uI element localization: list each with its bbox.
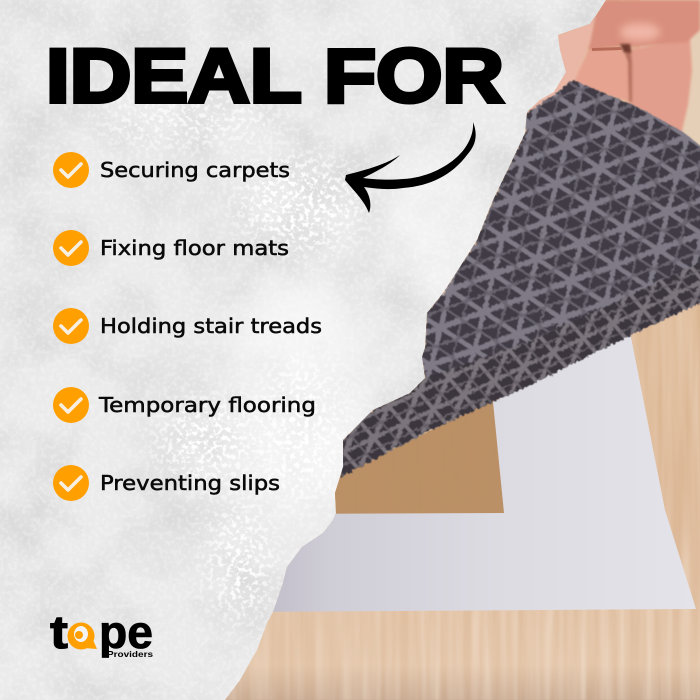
finger divider [622,46,632,102]
left knuckle line [592,47,622,51]
knuckle highlight [620,23,660,41]
item: securing carpets: Securing carpets [100,158,290,182]
item: holding stair treads [53,308,322,344]
item: preventing slips [53,465,280,501]
anti-slip mat: upper netting [340,80,700,477]
item: fixing floor mats: Fixing floor mats [100,236,289,260]
wood visible through tape window [330,400,505,514]
logo: tape providers: pe [99,606,153,658]
item: fixing floor mats [53,230,289,266]
logo: tape providers [50,606,153,659]
logo: tape providers: t [50,606,68,658]
title: IDEAL FOR [46,34,504,119]
white double-sided tape [250,332,696,612]
logo: tape providers: Providers [107,649,153,659]
right finger [627,38,692,135]
photo: torn-edge tape and floor [220,0,700,700]
list: uses [53,152,322,501]
hand background [640,0,700,160]
wood floor [220,0,700,700]
item: preventing slips: Preventing slips [100,471,280,495]
item: temporary flooring: Temporary flooring [98,393,316,417]
item: holding stair treads: Holding stair treads [100,314,322,338]
top finger [580,0,700,50]
hand: thumb [528,16,596,112]
icon: tape roll [68,622,97,650]
anti-slip mat: lower folded netting [340,262,700,477]
finger crease [620,44,631,53]
item: temporary flooring [53,387,316,423]
left finger [574,50,629,102]
arrow [345,122,476,213]
hand: fingers [570,0,700,135]
item: securing carpets [53,152,290,188]
